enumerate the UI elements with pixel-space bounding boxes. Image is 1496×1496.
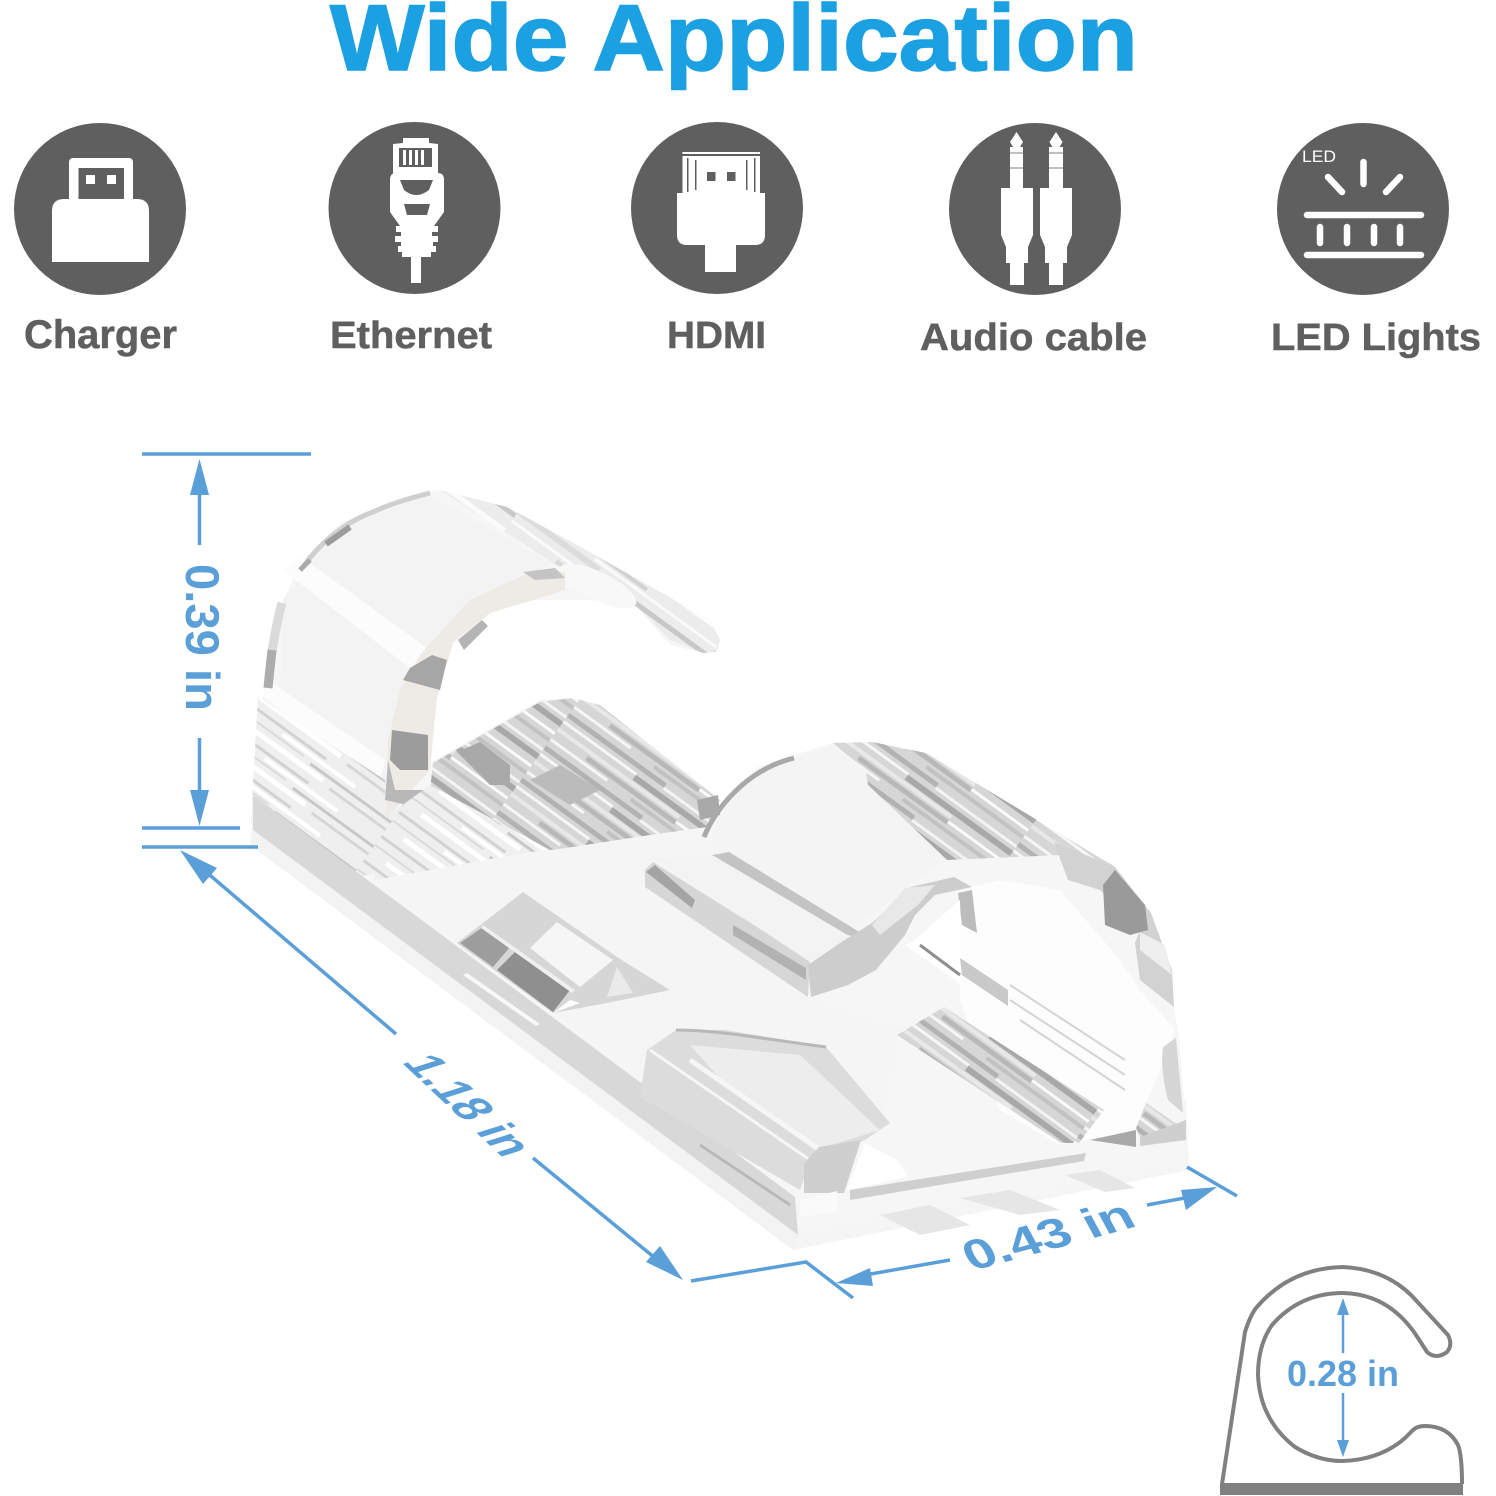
clip: channel streak: [711, 852, 861, 937]
clip: strip shadows: [385, 568, 565, 810]
clip: hook white bands: [262, 556, 430, 790]
clip: bubble sliver: [958, 890, 977, 933]
label: ethernet: Ethernet: [330, 315, 492, 357]
clip: front hollow stripes: [690, 1045, 880, 1150]
clip: right end light triangle: [1140, 1120, 1186, 1146]
clip: right arch top face: [711, 746, 947, 940]
clip: left hook top ridge: [440, 490, 720, 653]
clip: s-curve strip: [808, 877, 972, 997]
clip: raised channel side: [645, 862, 810, 997]
clip: hook highlight patch: [554, 555, 642, 617]
clip: lower right stripes: [897, 1007, 1104, 1143]
dimension: length 1.18 in: 1.18 in: [390, 1049, 546, 1162]
clip: band lower fade: [250, 830, 798, 1250]
clip: channel top: [653, 856, 856, 962]
panel: transparent cable clip product: [250, 490, 1189, 1250]
inner arrow and value: [1287, 1298, 1399, 1457]
clip: silhouette body: [250, 490, 1186, 1235]
dimension: length 1.18 in: [180, 850, 683, 1280]
clip: thin gray lines: [920, 945, 1125, 1090]
profile base: [1220, 1483, 1463, 1495]
clip: hook front inner strip: [385, 570, 565, 820]
clip: front base stripes: [880, 1170, 1135, 1235]
label: hdmi: HDMI: [667, 315, 766, 357]
label: charger: Charger: [24, 313, 177, 357]
clip: right corner highlight: [1140, 932, 1172, 975]
clip: front edge lines: [850, 1153, 1086, 1200]
icon: hdmi: [631, 122, 803, 294]
clip: channel side dark 2: [733, 925, 806, 980]
clip: hook main face: [280, 495, 553, 790]
icon: charger: [14, 123, 186, 295]
clip: back floor dark blocks: [457, 742, 720, 820]
clip: band highlight: [463, 973, 540, 1026]
icon: led lights: [1277, 123, 1449, 295]
inner arrow and value: 0.28 in: [1287, 1353, 1399, 1394]
dimension: height 0.39 in: [142, 454, 311, 847]
clip: right corner shading: [1054, 842, 1174, 1007]
profile outline: [1222, 1267, 1462, 1484]
clip: lower-left hook stripes: [252, 697, 425, 880]
clip: right corner dark: [1103, 870, 1148, 935]
dimension: height 0.39 in: 0.39 in: [176, 564, 229, 711]
clip: back floor stripes: [430, 698, 720, 852]
clip: front nose: [804, 1140, 861, 1193]
panel: connector applications: [14, 122, 1481, 359]
icon: ethernet: [328, 122, 500, 294]
clip: opening white wedge: [905, 900, 962, 985]
clip: front corner block: [800, 1191, 837, 1217]
clip: central top face: [375, 837, 900, 1150]
clip: nose white triangle: [847, 1143, 908, 1190]
clip: bubble white face: [960, 880, 1175, 1145]
clip: front hollow lines: [650, 1030, 826, 1205]
dimension: width 0.43 in: 0.43 in: [953, 1191, 1143, 1280]
icon: led lights: LED: [1302, 147, 1336, 166]
clip: s-curve highlights: [872, 885, 935, 935]
clip: right end stripes: [1136, 1103, 1178, 1137]
clip: right ridge stripes: [833, 742, 1115, 867]
label: led lights: LED Lights: [1271, 317, 1481, 359]
clip: outer rim: [268, 493, 430, 688]
clip: right arch rim: [704, 758, 794, 837]
clip: front hollow: [640, 1030, 890, 1190]
dimension: width 0.43 in: [691, 1167, 1237, 1298]
clip: mid stripes: [375, 785, 550, 880]
label: audio cable: Audio cable: [920, 317, 1147, 359]
diagram: clip side profile 0.28 in: [1220, 1267, 1463, 1495]
clip: right end dark triangle: [1090, 1130, 1136, 1147]
clip: base window: [457, 892, 670, 1013]
clip: base plate: [250, 845, 1189, 1250]
clip: window dark panes: [460, 922, 633, 1013]
clip: side gray band: [253, 795, 798, 1235]
clip: diagonal lines: [960, 958, 1008, 1006]
clip: right end pieces: [1162, 1038, 1183, 1113]
icon: audio cable: [949, 123, 1121, 295]
clip: channel side dark: [646, 865, 695, 908]
